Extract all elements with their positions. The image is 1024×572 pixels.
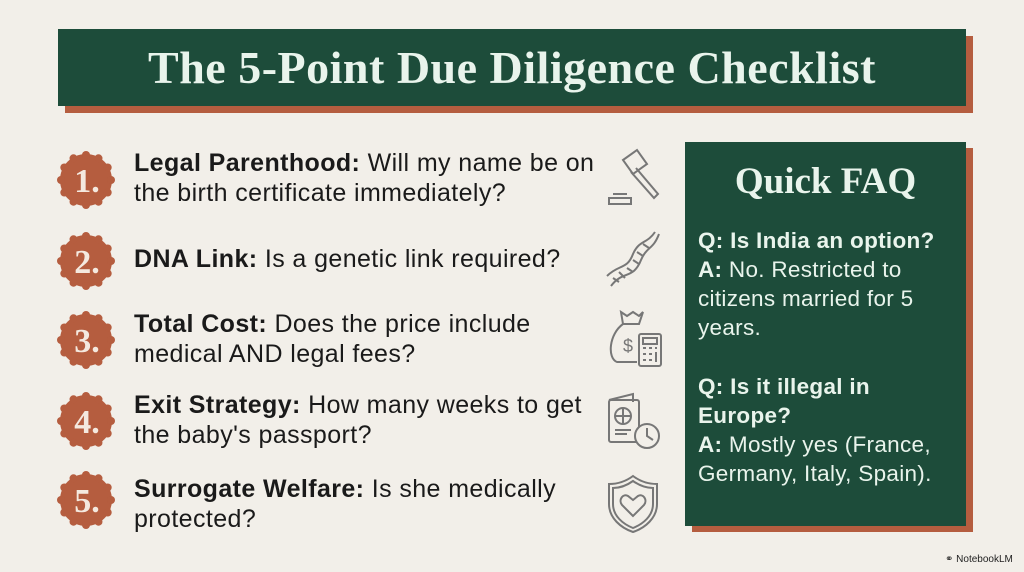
FAQ 1: Q: Is India an option? bbox=[698, 228, 935, 253]
FAQ 2 bbox=[698, 374, 932, 486]
panel: quick FAQ bbox=[685, 142, 966, 526]
icon: dna bbox=[606, 232, 660, 287]
item 2 text: DNA Link: Is a genetic link required? bbox=[134, 245, 561, 273]
badge 4 bbox=[57, 392, 115, 450]
item 4 text: Exit Strategy: How many weeks to get the baby's passport? bbox=[134, 391, 582, 449]
FAQ heading: Quick FAQ bbox=[735, 161, 916, 202]
icon: shield heart bbox=[608, 474, 658, 533]
icon: money bag and calculator: $ bbox=[623, 336, 633, 356]
FAQ 1: A: No. Restricted to citizens married for 5 years. bbox=[698, 257, 913, 340]
badge 3 bbox=[57, 311, 115, 369]
badge 5: 5. bbox=[74, 483, 100, 520]
item 3 text: Total Cost: Does the price include medical AND legal fees? bbox=[134, 310, 531, 368]
badge 2: 2. bbox=[74, 244, 100, 281]
icon: passport and clock bbox=[608, 392, 660, 449]
badge 4: 4. bbox=[74, 404, 100, 441]
title: The 5-Point Due Diligence Checklist bbox=[148, 42, 876, 93]
item 1 text: Legal Parenthood: Will my name be on the birth certificate immediately? bbox=[134, 149, 594, 207]
badge 3: 3. bbox=[74, 323, 100, 360]
badge 2 bbox=[57, 232, 115, 290]
FAQ 2: Q: Is it illegal in Europe? bbox=[698, 374, 870, 428]
badge 1: 1. bbox=[74, 163, 100, 200]
FAQ 2: A: Mostly yes (France, Germany, Italy, Spain). bbox=[698, 432, 932, 486]
title bbox=[58, 29, 966, 106]
badge 1 bbox=[57, 151, 115, 209]
icon: gavel bbox=[608, 148, 660, 205]
logo: NotebookLM: ⚭ NotebookLM bbox=[945, 554, 1013, 565]
FAQ 1 bbox=[698, 228, 935, 340]
icon: money bag and calculator bbox=[610, 310, 662, 367]
item 5 text: Surrogate Welfare: Is she medically protected? bbox=[134, 475, 556, 533]
badge 5 bbox=[57, 471, 115, 529]
